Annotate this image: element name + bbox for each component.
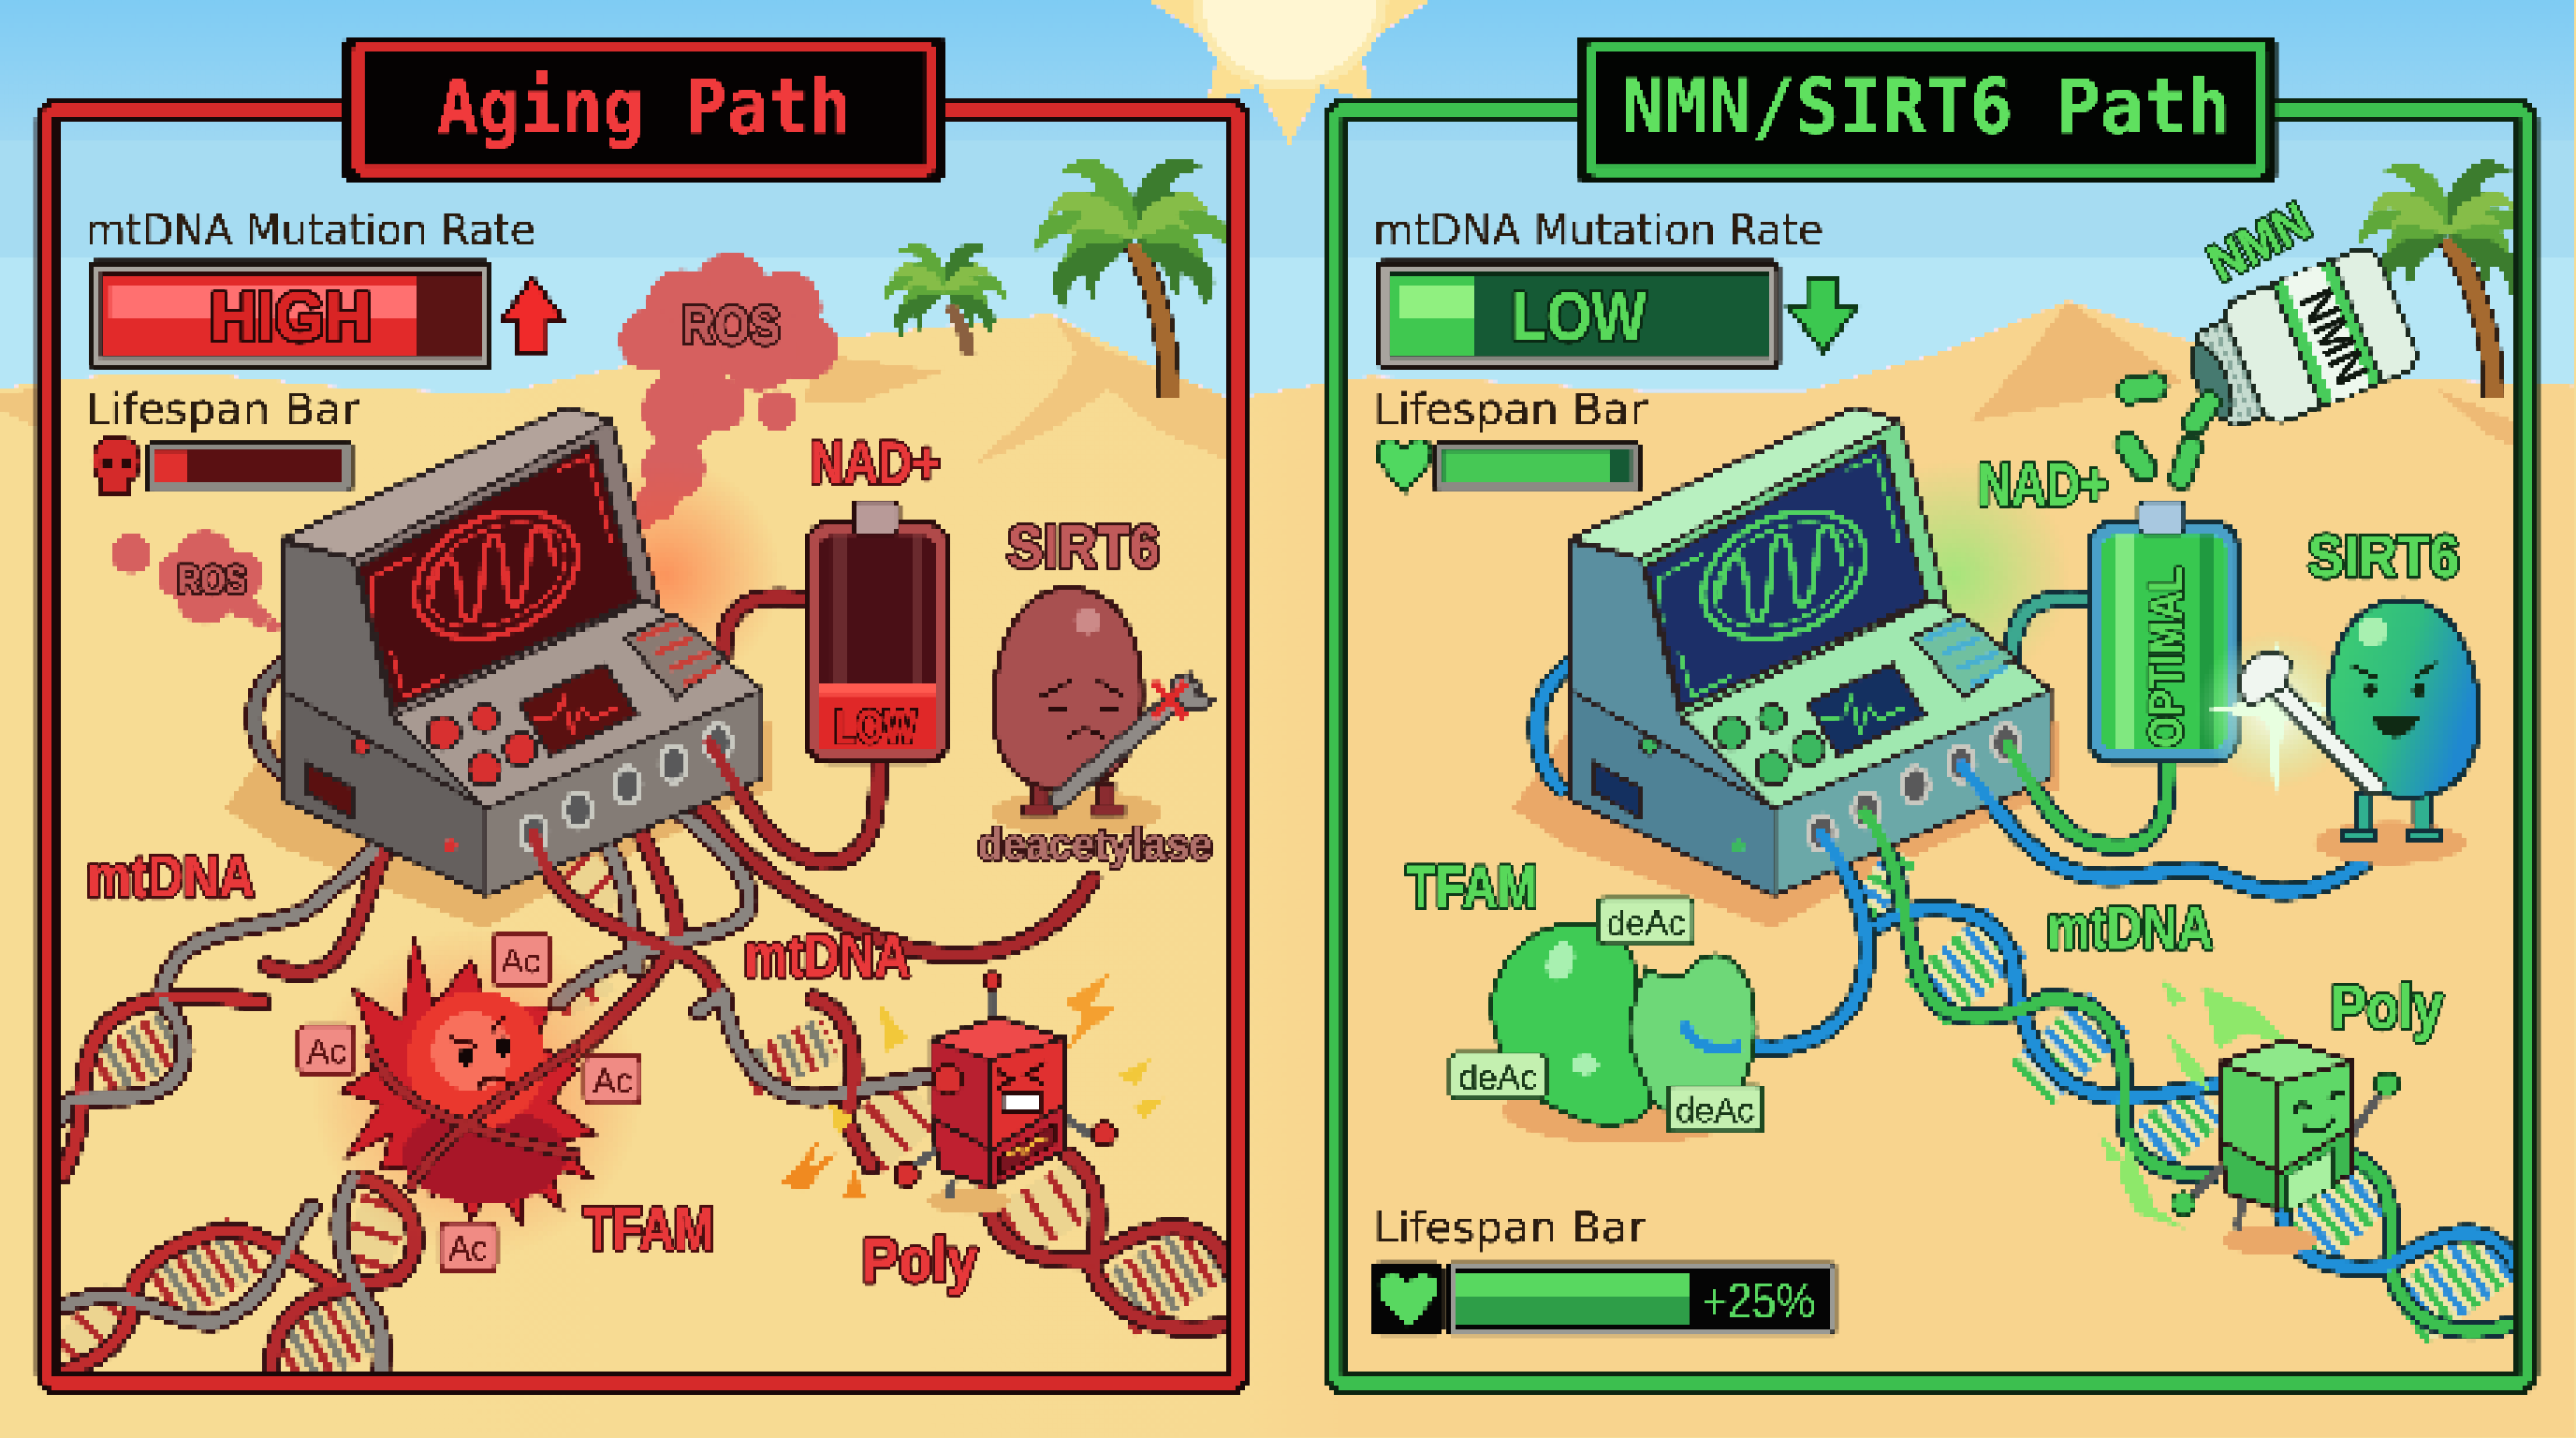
label: deacetylase: deacetylase [977, 820, 1212, 870]
icon: up arrow [501, 278, 565, 352]
machine glow [550, 460, 781, 690]
label: OPTIMAL: OPTIMAL [2142, 566, 2192, 748]
character: TFAM spiked [312, 929, 640, 1257]
tags: deAc [1451, 899, 1763, 1132]
lifespan bar full [1371, 1262, 1837, 1336]
mutation rate bar [89, 259, 493, 370]
tag text deAc: deAc [1458, 1059, 1538, 1097]
character: TFAM bean [1492, 923, 1755, 1143]
tag text deAc: deAc [1676, 1092, 1754, 1130]
tag text Ac: Ac [501, 942, 540, 980]
tag text Ac: Ac [307, 1032, 346, 1070]
title: Aging Path: Aging Path [437, 64, 851, 152]
label: mtDNA left: mtDNA [87, 844, 255, 910]
label: mtDNA: mtDNA [2047, 896, 2213, 961]
panel: NMN/SIRT6 path [1335, 37, 2538, 1385]
label: NMN tilted: NMN [2199, 191, 2320, 292]
heading: mtDNA Mutation Rate: mtDNA Mutation Rate [85, 205, 535, 255]
tag text deAc: deAc [1606, 904, 1686, 943]
tag text Ac: Ac [448, 1229, 488, 1268]
character: SIRT6 energised [2196, 600, 2479, 864]
label: LOW battery: LOW [835, 699, 916, 753]
label: TFAM: TFAM [1406, 855, 1538, 920]
label: SIRT6: SIRT6 [2308, 524, 2459, 590]
label: NAD+: NAD+ [1978, 452, 2108, 518]
NMN bottle [2173, 244, 2422, 447]
label: Poly: Poly [2331, 974, 2443, 1043]
palm trees [883, 145, 1233, 399]
label: SIRT6: SIRT6 [1007, 514, 1160, 580]
ROS smoke cloud [620, 253, 838, 529]
icon: skull [94, 437, 139, 492]
title plate [344, 37, 944, 183]
title plate [1577, 37, 2276, 183]
label: mtDNA centre: mtDNA [744, 923, 910, 989]
mtDNA helix rungs [1865, 855, 2500, 1318]
machine: damaged mitochondria console [283, 407, 762, 895]
label: ROS small: ROS [178, 558, 246, 602]
icon: heart small [1377, 440, 1431, 492]
lifespan bar mid [1434, 442, 1641, 492]
label: NMN on bottle: NMN [2288, 281, 2379, 393]
heading: Lifespan Bar lower: Lifespan Bar [1373, 1203, 1647, 1253]
small ROS cloud [111, 531, 279, 633]
machine shadow [1513, 723, 2060, 929]
tag text deAc [1458, 904, 1754, 1130]
heading: Lifespan Bar: Lifespan Bar [85, 385, 360, 434]
mutation rate bar [1377, 259, 1780, 370]
label: LOW: LOW [1512, 277, 1647, 355]
label: ROS large: ROS [681, 296, 781, 355]
icon: down arrow [1789, 278, 1856, 352]
lifespan bar low [146, 442, 353, 492]
cables over machine [1679, 746, 2364, 1048]
mtDNA strands and cables [1537, 598, 2517, 1331]
cables over machine [534, 742, 879, 986]
mtDNA helix rungs [69, 862, 1208, 1364]
panel: aging path [47, 37, 1238, 1385]
heading: Lifespan Bar: Lifespan Bar [1373, 385, 1648, 434]
robot: Poly angry [895, 973, 1116, 1214]
label: TFAM: TFAM [583, 1196, 714, 1262]
machine: healthy mitochondria console [1571, 407, 2050, 895]
label: NAD+: NAD+ [810, 431, 940, 496]
panel frame green [1335, 110, 2526, 1385]
title: NMN/SIRT6 Path: NMN/SIRT6 Path [1621, 64, 2231, 152]
pills [2111, 373, 2224, 492]
palm tree [2358, 149, 2538, 399]
label: Poly: Poly [862, 1226, 977, 1296]
icon: sun [1143, 0, 1436, 144]
label: +25%: +25% [1702, 1274, 1815, 1329]
sand dunes [0, 301, 2576, 1438]
tags: Ac [299, 933, 640, 1271]
tag text Ac [307, 942, 633, 1268]
mtDNA strands and cables [63, 597, 1229, 1377]
machine glow [1840, 460, 2070, 690]
character: SIRT6 tired [990, 588, 1212, 836]
tag text Ac: Ac [593, 1062, 633, 1100]
robot: Poly happy [2172, 1040, 2398, 1255]
panel frame red [47, 110, 1238, 1385]
damage sparks [782, 973, 1166, 1196]
machine shadow [225, 723, 772, 929]
green wisps [2100, 977, 2300, 1229]
battery: NAD+ low [807, 501, 948, 762]
label: HIGH: HIGH [211, 277, 372, 355]
heading: mtDNA Mutation Rate: mtDNA Mutation Rate [1373, 205, 1823, 255]
battery: NAD+ optimal [2089, 501, 2237, 762]
